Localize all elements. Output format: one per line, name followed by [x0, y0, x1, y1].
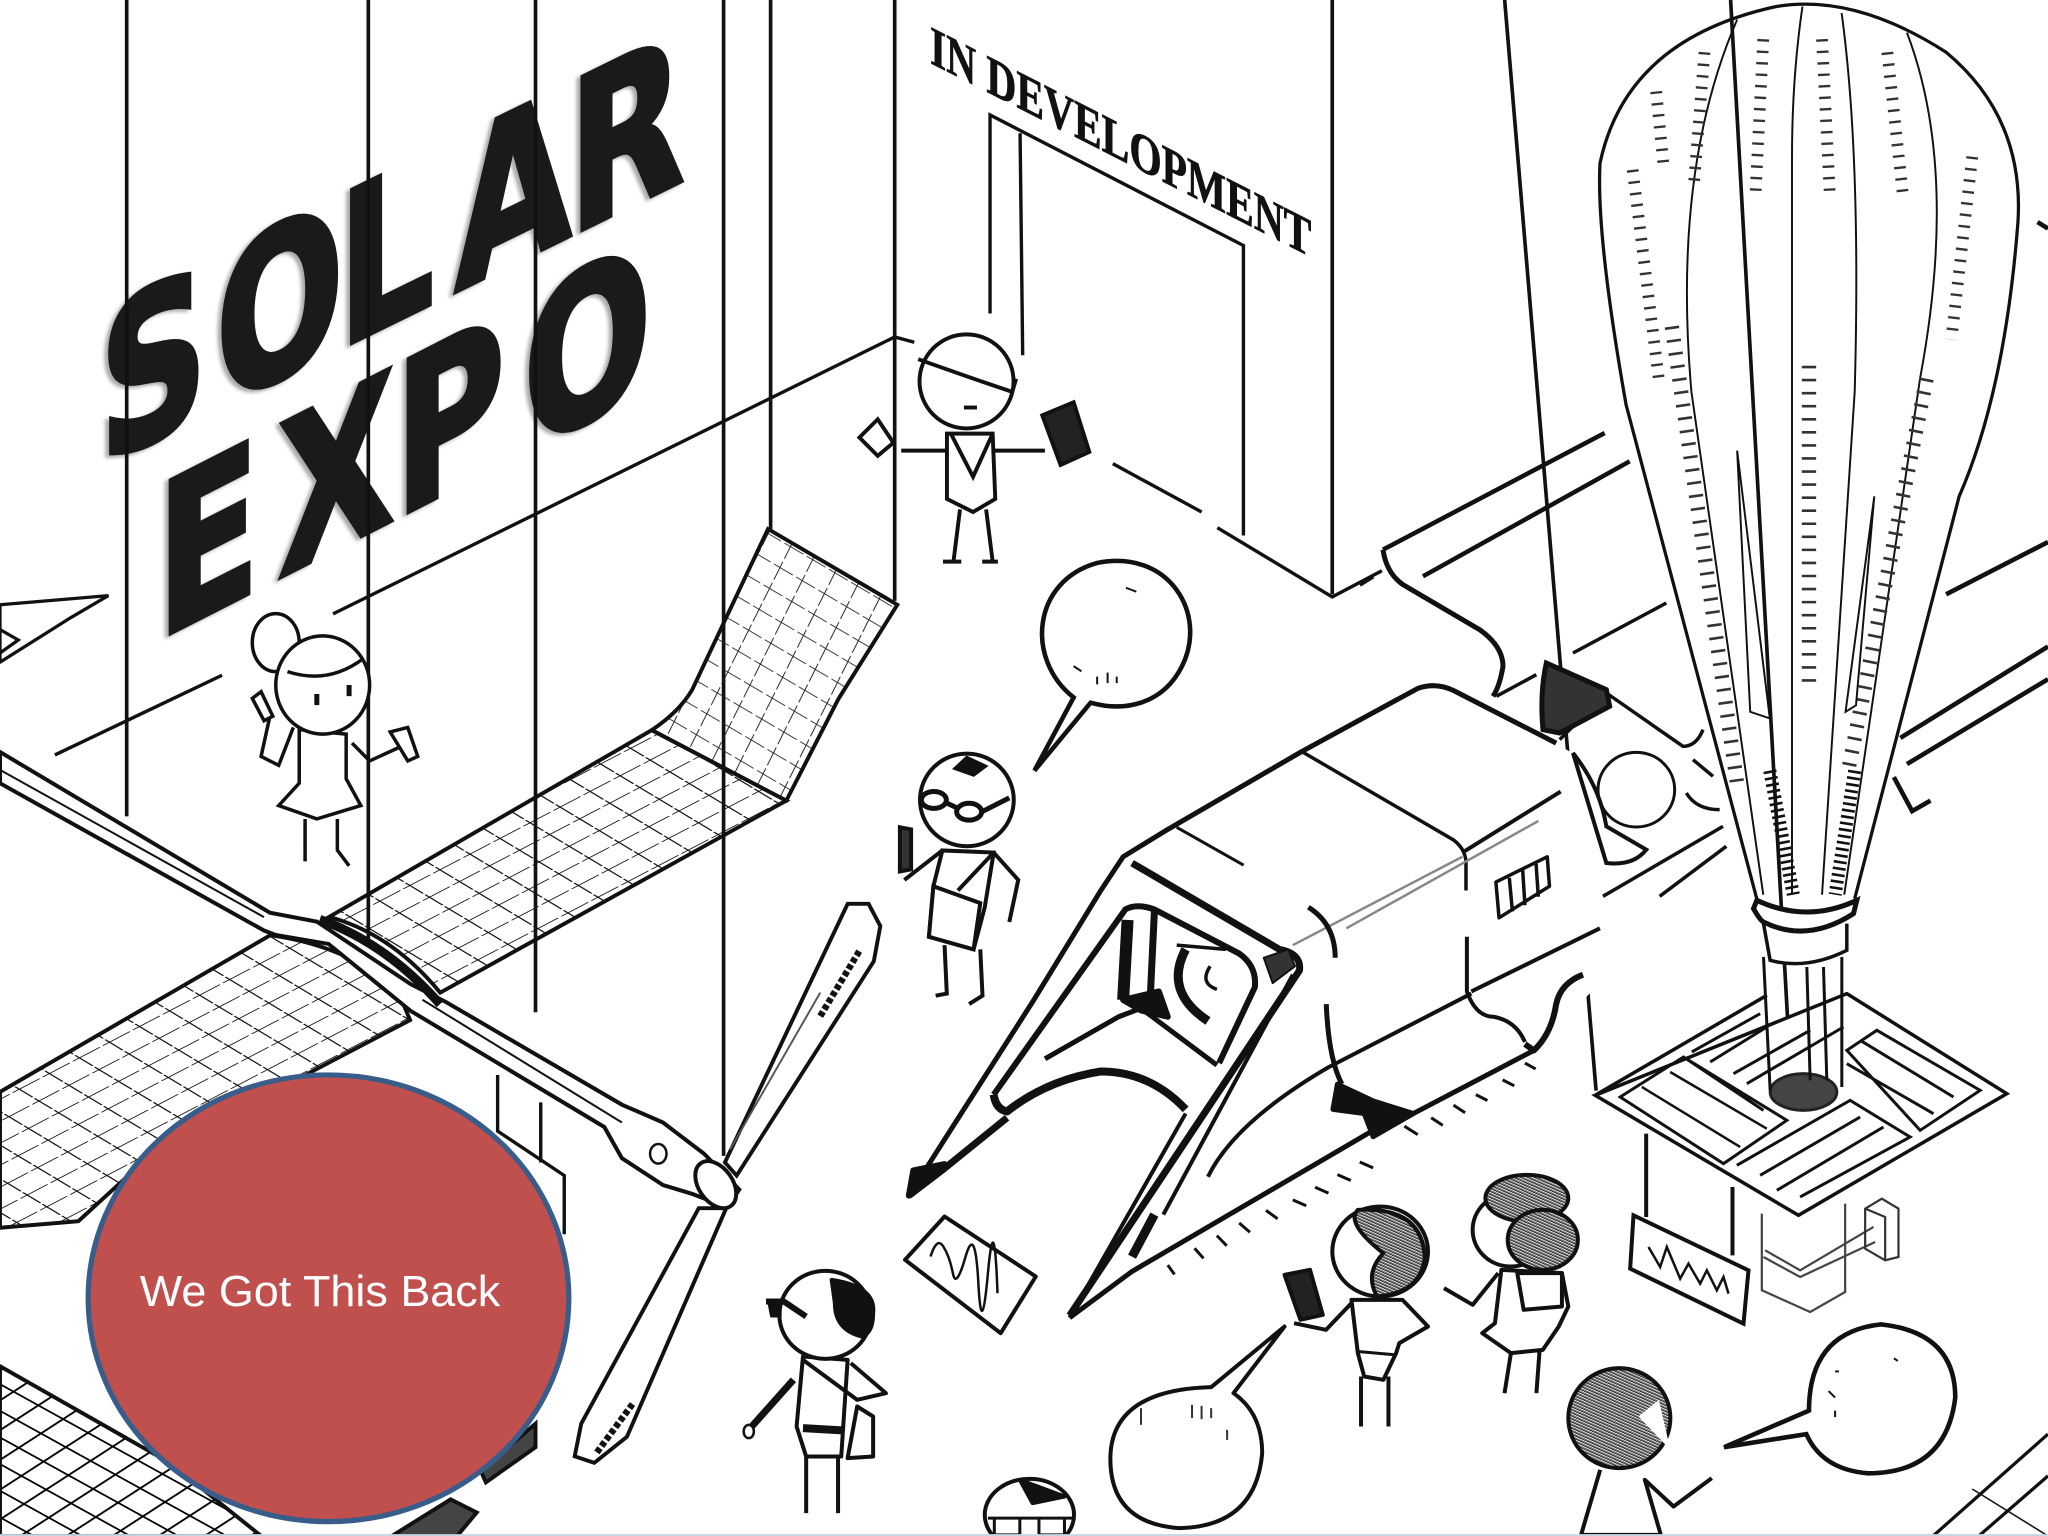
callout: We Got This Back — [88, 1075, 569, 1522]
info plaque right — [1630, 1215, 1748, 1324]
platform pedestal and plug — [1646, 1134, 1898, 1312]
wing tip at left edge — [0, 596, 108, 662]
right side wing — [1894, 222, 2048, 811]
solar plane: near wing — [0, 935, 410, 1228]
hall columns — [127, 0, 1799, 1215]
speech bubble bottom right — [1724, 1324, 1955, 1473]
person: attendee with phones, top — [859, 334, 1089, 562]
speech bubble bottom left — [1110, 1326, 1285, 1528]
sign: IN DEVELOPMENT: IN DEVELOPMENT — [930, 14, 1311, 269]
info plaque left — [905, 1217, 1036, 1333]
speech bubble top — [1034, 561, 1190, 771]
doorway — [990, 115, 1243, 536]
lower solar panel — [0, 1366, 536, 1536]
person: man with glasses — [900, 754, 1018, 1004]
rear machine rails and engine — [1360, 433, 1726, 896]
solar machine: body — [909, 686, 1730, 1318]
sign: SOLAR EXPO: EXPO — [157, 194, 651, 689]
person: phone holder — [1285, 1207, 1428, 1426]
floor panel corner at bottom right — [1933, 1434, 2048, 1536]
support struts behind plane — [498, 1075, 564, 1234]
solar machine: front scoop — [909, 863, 1300, 1318]
balloon basket platform — [1595, 900, 2007, 1215]
sign: SOLAR EXPO: SOLAR — [99, 0, 684, 516]
propeller — [575, 904, 880, 1463]
person: girl with ponytail — [252, 614, 418, 866]
person: woman with curly hair — [1444, 1175, 1578, 1393]
person: head at bottom edge — [985, 1479, 1074, 1536]
solar plane: far wing — [329, 730, 786, 993]
hot air balloon — [1600, 4, 2018, 899]
floor and wall lines — [55, 337, 1382, 755]
solar plane: wing tip — [652, 529, 897, 801]
bubbles and figures at floor level — [744, 1175, 1712, 1536]
person: woman at bottom — [1568, 1368, 1712, 1535]
bottom edge line — [0, 1534, 2048, 1536]
callout: We Got This Back: We Got This Back — [140, 1268, 501, 1316]
solar plane: fuselage — [0, 752, 739, 1207]
person: man with bag — [744, 1271, 886, 1513]
